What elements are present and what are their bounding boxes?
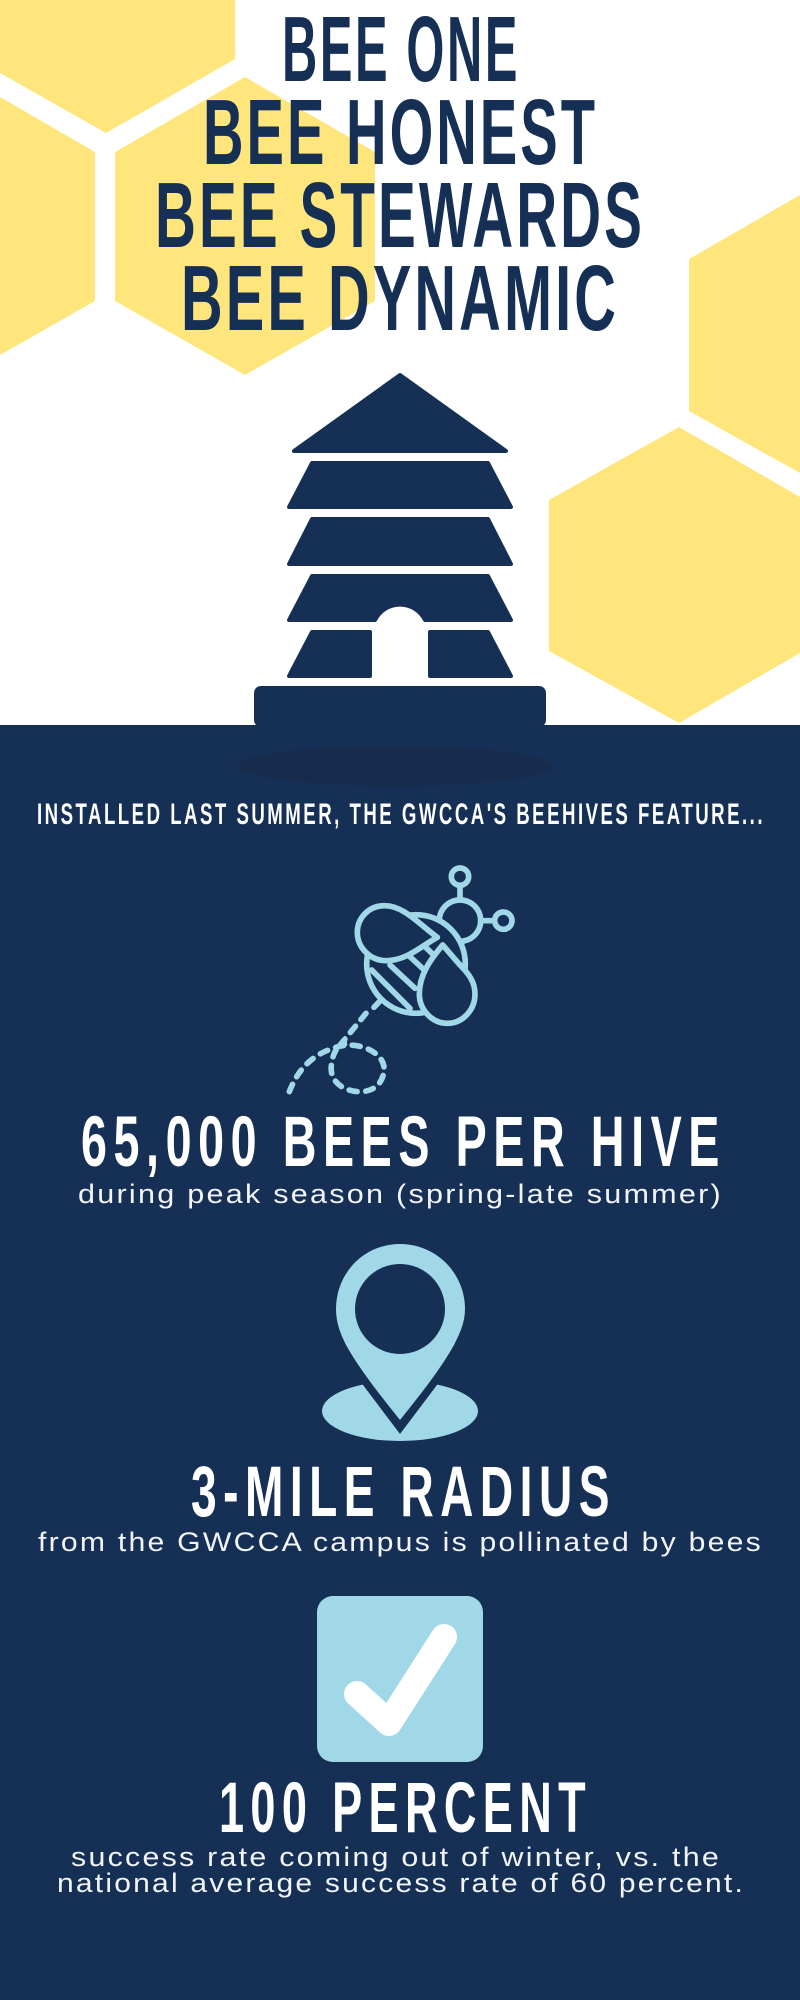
icon: beehive (256, 375, 544, 725)
stat: radius: from the GWCCA campus is pollinated by bees (38, 1527, 763, 1557)
icon: map pin (322, 1244, 478, 1441)
stat: percent (57, 1769, 745, 1898)
stat: radius (38, 1453, 763, 1557)
stat: percent: 100 PERCENT (219, 1769, 592, 1848)
hive shadow (238, 746, 552, 786)
navy lower panel (0, 725, 800, 2000)
stat: bees per hive: during peak season (spring-late summer) (78, 1179, 723, 1209)
icon: bee with dashed flight path (289, 868, 512, 1092)
stat: percent: national average success rate of 60 percent. (57, 1868, 745, 1898)
icon: check box (317, 1596, 483, 1762)
yellow honeycomb background (0, 0, 800, 723)
stat: percent: success rate coming out of winter, vs. the (71, 1842, 721, 1872)
title: BEE ONE (282, 0, 520, 101)
title (155, 0, 645, 350)
stat: bees per hive (78, 1103, 726, 1209)
